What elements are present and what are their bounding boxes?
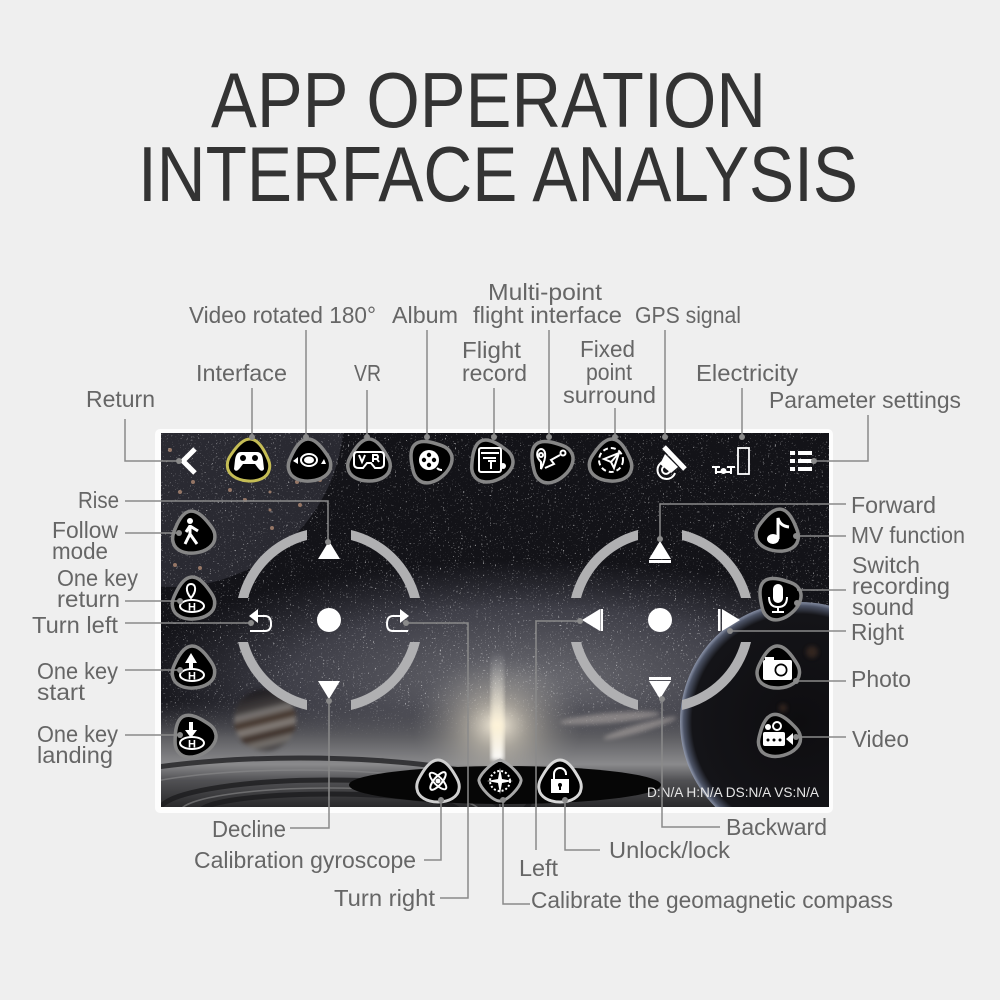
labels: left column: Rise — [78, 487, 119, 513]
title — [138, 56, 858, 218]
labels: top row: Interface — [196, 360, 287, 386]
icon: multi-point flight — [520, 430, 580, 490]
icon: recording mic — [748, 567, 808, 627]
icon: one key return — [170, 575, 216, 621]
labels: top row: record — [462, 360, 527, 386]
icon: video rotate — [286, 437, 332, 483]
labels: left column: Turn left — [32, 612, 119, 638]
icon: one key return: H — [188, 602, 196, 614]
labels: top row: VR — [354, 360, 381, 386]
icon: photo — [756, 645, 800, 689]
labels: top row: Parameter settings — [769, 387, 961, 413]
icon: VR — [348, 439, 390, 481]
labels: bottom row — [194, 814, 893, 913]
labels: top row: Return — [86, 386, 155, 412]
labels: right column: sound — [852, 594, 914, 620]
icon: one key start — [170, 644, 216, 690]
labels: right column: Right — [851, 619, 905, 645]
icon: MV music — [754, 506, 802, 554]
leader lines — [125, 330, 868, 904]
labels: right column: Forward — [851, 492, 936, 518]
labels: top row: surround — [563, 382, 656, 408]
labels: right column: recording — [852, 573, 950, 599]
icon: unlock — [539, 760, 581, 802]
labels: left column — [32, 487, 138, 768]
labels: right column: Video — [852, 726, 909, 752]
icon: parameter list — [790, 451, 812, 471]
icon: one key start: H — [188, 670, 196, 682]
labels: top row: Album — [392, 302, 458, 328]
labels: right column: MV function — [851, 522, 965, 548]
labels: bottom row: Decline — [212, 816, 286, 842]
icon: album — [399, 430, 459, 490]
icon: interface gamepad — [226, 437, 272, 483]
left joystick controls — [249, 541, 409, 699]
labels: left column: One key — [57, 565, 138, 591]
icon: video camera — [752, 709, 804, 761]
labels: left column: landing — [37, 742, 113, 768]
labels: left column: One key — [37, 721, 118, 747]
icon: geomagnetic compass — [479, 760, 521, 801]
right joystick controls — [582, 541, 740, 699]
labels: right column — [851, 492, 965, 752]
labels: bottom row: Unlock/lock — [609, 837, 730, 863]
icon: GPS signal — [658, 447, 685, 479]
labels: bottom row: Left — [519, 855, 559, 881]
icon: one key landing — [164, 706, 222, 764]
labels: bottom row: Calibration gyroscope — [194, 847, 416, 873]
left joystick arcs — [238, 530, 420, 710]
icon: follow mode — [169, 508, 217, 556]
icon: drone battery — [712, 448, 749, 474]
labels: left column: Follow — [52, 517, 118, 543]
labels: top row: GPS signal — [635, 302, 741, 328]
labels: right column: Photo — [851, 666, 911, 692]
labels: top row: Fixed — [580, 336, 635, 362]
labels: top row: Flight — [462, 337, 522, 363]
labels: left column: return — [57, 586, 120, 612]
icon: calibration gyroscope — [417, 760, 459, 802]
labels: top row: Multi-point — [488, 279, 603, 305]
labels: left column: mode — [52, 538, 108, 564]
icon: flight record — [462, 432, 518, 488]
labels: top row: point — [586, 359, 633, 385]
right joystick arcs — [571, 530, 751, 710]
labels: bottom row: Calibrate the geomagnetic compass — [531, 887, 893, 913]
labels: top row — [86, 279, 961, 413]
icon: fixed point surround — [588, 437, 634, 483]
labels: bottom row: Backward — [726, 814, 827, 840]
labels: left column: One key — [37, 658, 118, 684]
labels: left column: start — [37, 679, 86, 705]
title: APP OPERATION — [211, 56, 766, 144]
labels: top row: flight interface — [473, 302, 622, 328]
panel: app screen: D:N/A H:N/A DS:N/A VS:N/A — [647, 785, 819, 800]
title: INTERFACE ANALYSIS — [138, 130, 858, 218]
labels: bottom row: Turn right — [334, 885, 436, 911]
labels: top row: Video rotated 180° — [189, 302, 376, 328]
panel: app screen — [155, 429, 833, 813]
icon: one key landing: H — [188, 738, 196, 750]
icon: return arrow — [183, 449, 195, 473]
labels: right column: Switch — [852, 552, 920, 578]
labels: top row: Electricity — [696, 360, 799, 386]
